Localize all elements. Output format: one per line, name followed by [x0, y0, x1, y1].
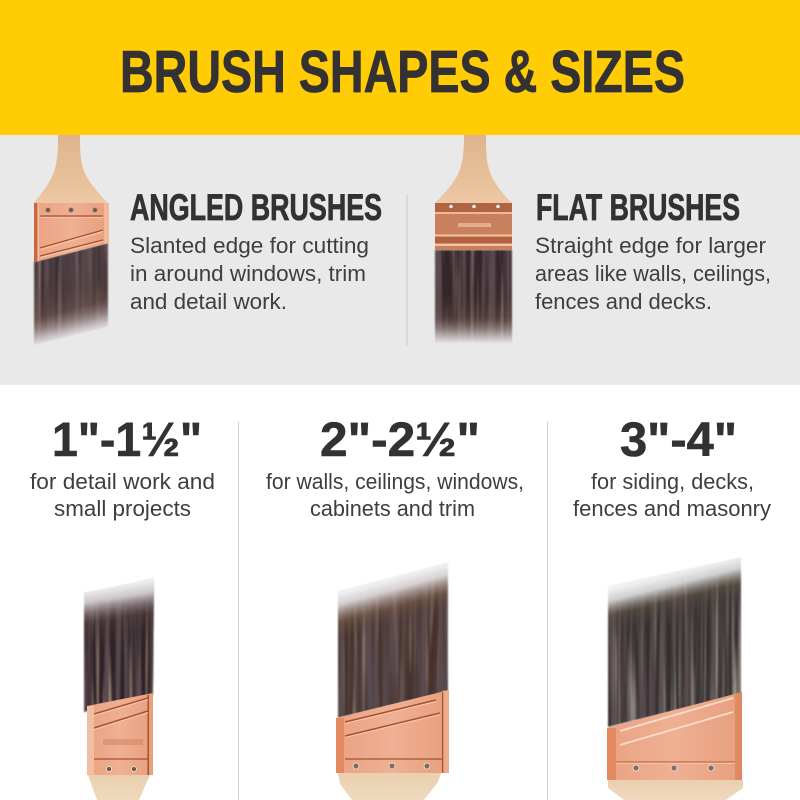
caption: fences and masonry	[573, 496, 771, 521]
column dividers	[238, 422, 548, 800]
icon: medium angled brush	[336, 563, 449, 800]
icon: small angled brush	[84, 578, 154, 800]
size heading: 1"-1½"	[52, 414, 202, 467]
text: flat brushes description: fences and decks.	[535, 289, 712, 314]
size heading: 3"-4"	[620, 414, 737, 467]
caption: for siding, decks,	[591, 469, 754, 494]
icon: large angled brush	[607, 558, 743, 800]
panel: 3 to 4 inch	[573, 414, 771, 800]
text: flat brushes description: areas like walls, ceilings,	[535, 261, 771, 286]
text: angled brushes description: in around windows, trim	[130, 261, 366, 286]
text: flat brushes description: Straight edge for larger	[535, 233, 766, 258]
panel: 1 to 1.5 inch	[30, 414, 215, 800]
heading: angled brushes: ANGLED BRUSHES	[130, 187, 382, 228]
divider	[406, 195, 408, 346]
caption: cabinets and trim	[310, 496, 475, 521]
panel: brush shapes	[0, 135, 800, 385]
caption: for detail work and	[30, 469, 215, 494]
text: angled brushes description: and detail work.	[130, 289, 287, 314]
panel: 2 to 2.5 inch	[266, 414, 524, 800]
icon: angled brush	[34, 135, 109, 344]
caption: small projects	[54, 496, 191, 521]
title banner	[0, 0, 800, 135]
caption: for walls, ceilings, windows,	[266, 469, 524, 494]
icon: flat brush	[435, 135, 512, 344]
size heading: 2"-2½"	[320, 414, 480, 467]
text: angled brushes description: Slanted edge for cutting	[130, 233, 369, 258]
